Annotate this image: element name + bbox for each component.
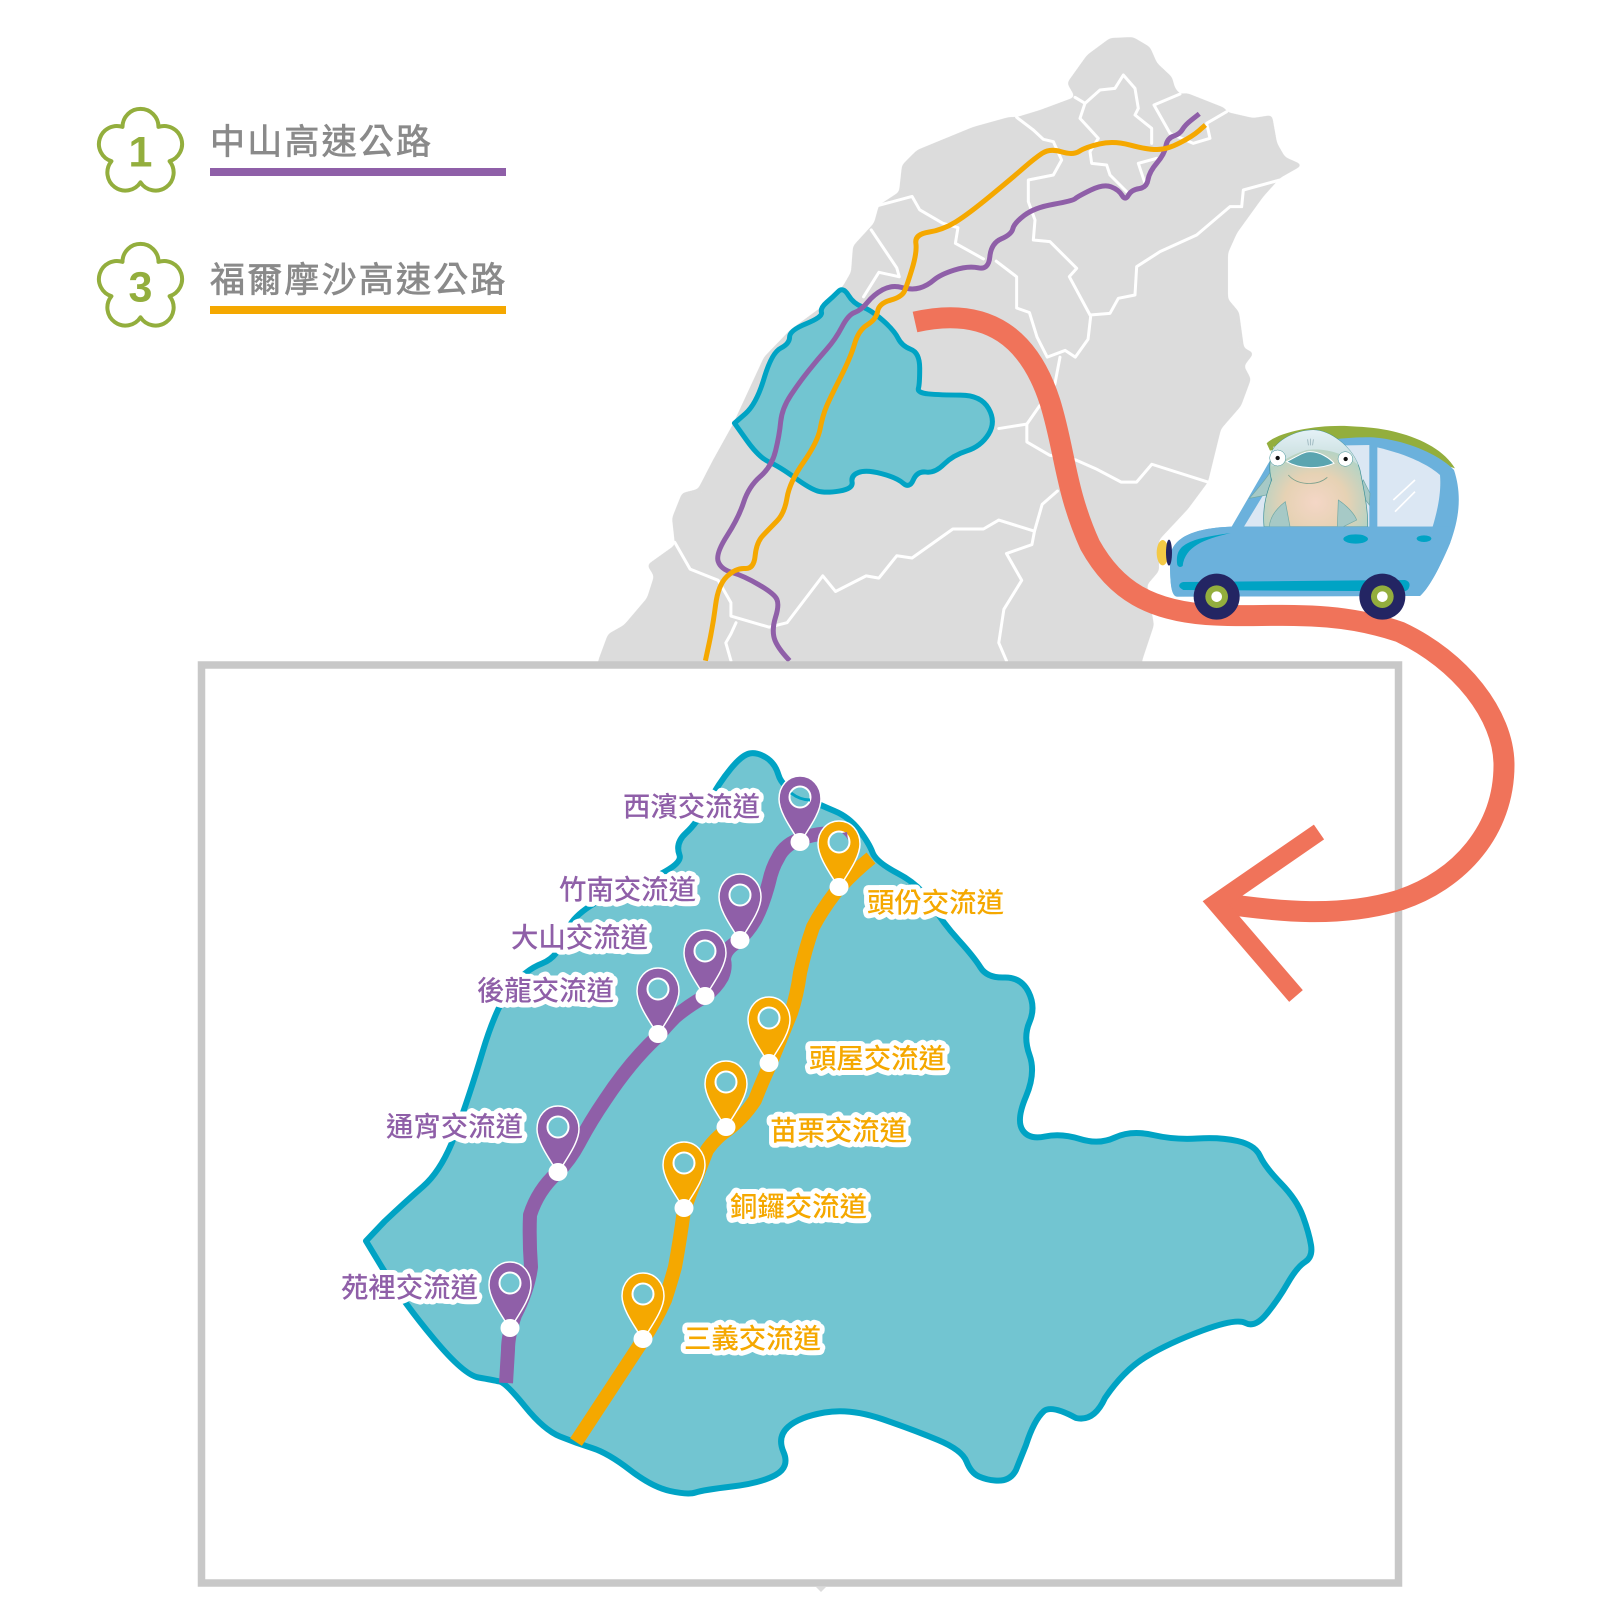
legend: Sun Yat-sen freeway <box>99 109 506 191</box>
pin: Sanyi interchange <box>622 1273 664 1348</box>
car roof stripe <box>1267 426 1455 468</box>
arrow: salmon route curve from map to inset <box>915 318 1504 996</box>
icon: flower badge 1 <box>99 109 182 191</box>
pin: Tongluo interchange <box>663 1142 705 1217</box>
map: central county boundaries <box>675 196 1208 661</box>
label: Sanyi: 三義交流道 <box>684 1323 821 1354</box>
front window <box>1244 445 1369 527</box>
car body <box>1170 437 1459 597</box>
label: Tongluo: 銅鑼交流道 <box>730 1191 867 1222</box>
hood accent <box>1177 533 1231 567</box>
icon: blue car with fish driver <box>1157 426 1459 620</box>
legend title: 中山高速公路 <box>210 123 433 162</box>
label: Yuanli: 苑裡交流道 <box>341 1272 478 1303</box>
icon: flower badge 3: 3 <box>129 264 152 312</box>
label: Zhunan: 竹南交流道 <box>559 874 696 905</box>
pin: Zhunan interchange <box>719 874 761 949</box>
route: purple freeway through Miaoli <box>506 833 840 1383</box>
window glare <box>1393 480 1415 512</box>
fish driver <box>1249 430 1370 527</box>
pin: Toufen interchange <box>818 821 860 896</box>
label: Xibin: 西濱交流道 <box>623 791 760 822</box>
label: Touwu: 頭屋交流道 <box>809 1043 946 1074</box>
map: Miaoli county shape <box>366 753 1311 1493</box>
map: northern Taiwan landmass <box>598 37 1303 700</box>
rear window <box>1377 447 1440 527</box>
panel: Miaoli county detail map <box>341 753 1311 1493</box>
headlight <box>1157 540 1172 566</box>
pin: Tongxiao interchange <box>537 1106 579 1181</box>
label: Tongxiao: 通宵交流道 <box>386 1111 523 1142</box>
car lower door panel <box>1170 527 1453 597</box>
icon: flower badge 3 <box>99 244 182 326</box>
map: orange Formosa freeway route <box>705 125 1205 661</box>
pin: Yuanli interchange <box>489 1262 531 1337</box>
label: Toufen: 頭份交流道 <box>867 887 1004 918</box>
rear wheel <box>1359 574 1405 620</box>
label: Miaoli: 苗栗交流道 <box>770 1115 907 1146</box>
pin: Miaoli interchange <box>705 1061 747 1136</box>
side strip <box>1179 580 1410 591</box>
pin: Houlong interchange <box>637 968 679 1043</box>
pin: Xibin interchange <box>779 776 821 851</box>
front wheel <box>1194 574 1240 620</box>
pin: Touwu interchange <box>748 997 790 1072</box>
decorative tip below frame <box>816 1587 826 1592</box>
map: Miaoli county highlight <box>734 290 992 492</box>
panel: Taiwan overview map <box>598 37 1303 700</box>
map: purple Sun Yat-sen freeway route <box>718 114 1199 661</box>
legend title: 福爾摩沙高速公路 <box>210 261 508 300</box>
legend: Formosa freeway <box>99 244 508 326</box>
legend line orange <box>210 306 506 314</box>
label: Houlong: 後龍交流道 <box>477 975 614 1006</box>
legend line purple <box>210 168 506 176</box>
icon: flower badge 1: 1 <box>129 129 152 177</box>
pin: Dashan interchange <box>684 930 726 1005</box>
label: Dashan: 大山交流道 <box>511 922 648 953</box>
route: orange freeway through Miaoli <box>576 858 871 1442</box>
door handles <box>1343 534 1431 544</box>
map: northern county boundaries <box>1017 75 1280 315</box>
panel: inset frame for Miaoli <box>202 665 1398 1583</box>
map: central and western details <box>675 114 1208 661</box>
